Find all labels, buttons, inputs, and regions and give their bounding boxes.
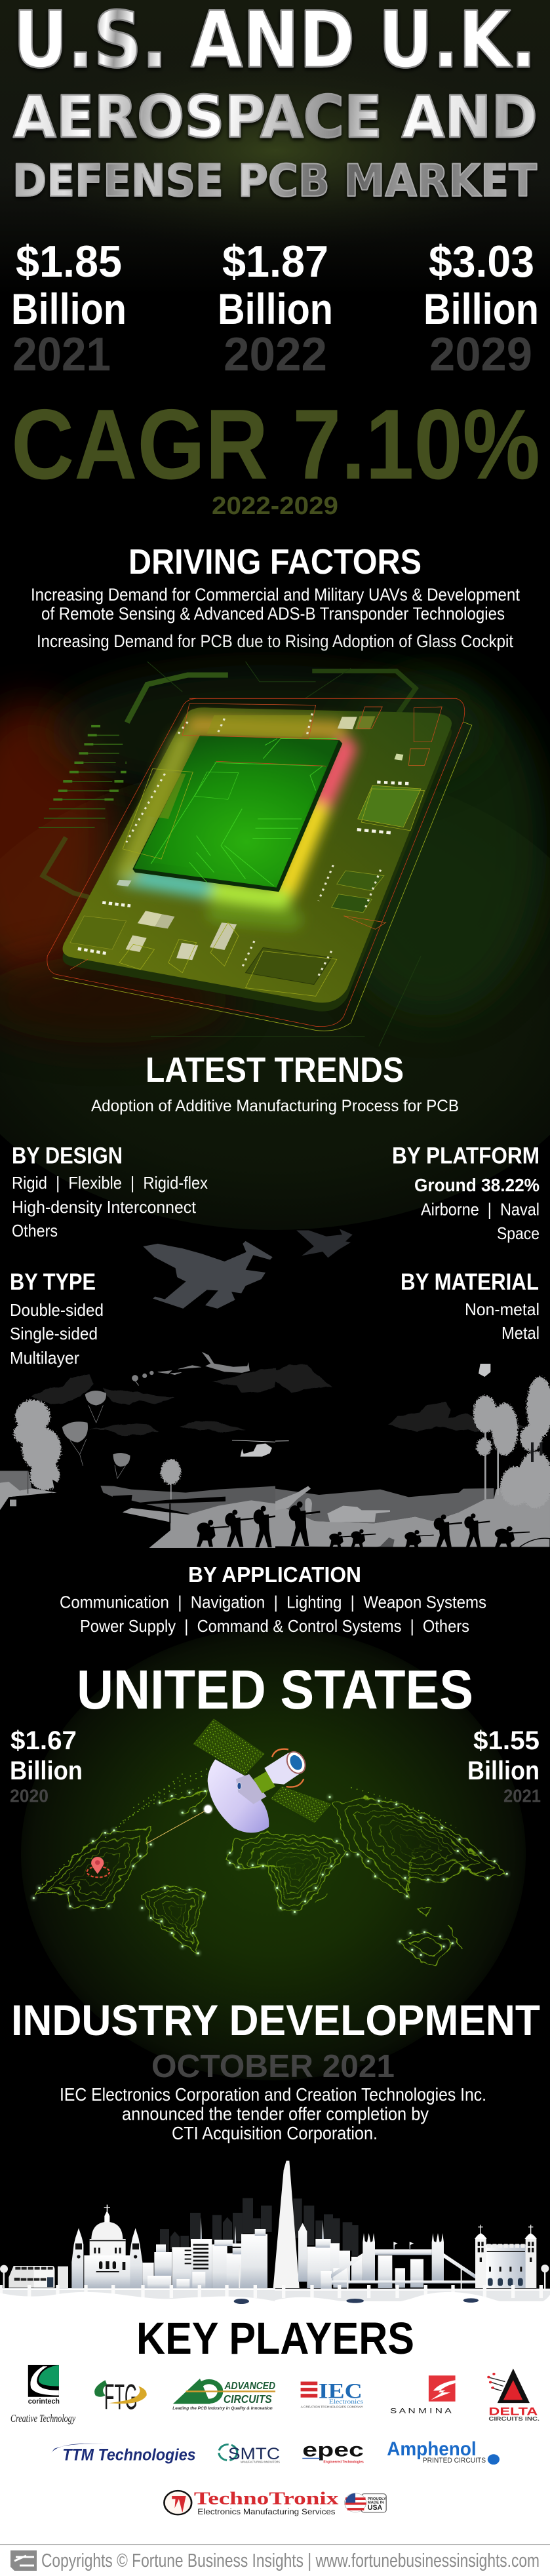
helicopter top bbox=[275, 1364, 490, 1441]
ambient glow bbox=[0, 665, 547, 1043]
icon: small jet bbox=[296, 1229, 353, 1258]
latest trends heading: LATEST TRENDS bbox=[146, 1050, 404, 1090]
driving factors text bbox=[31, 585, 520, 651]
regional stat 2020 bbox=[10, 1726, 83, 1806]
board base bbox=[63, 707, 452, 1012]
logo: TechnoTronix bbox=[164, 2487, 386, 2516]
United States heading: UNITED STATES bbox=[77, 1659, 473, 1720]
segment: by application: BY APPLICATION bbox=[188, 1562, 361, 1587]
stat 2022: 2022 bbox=[224, 328, 327, 381]
illustration: skyline right bbox=[273, 2161, 550, 2308]
soldiers bbox=[197, 1506, 282, 1547]
bus bbox=[9, 2266, 54, 2288]
stat 2022: $1.87 bbox=[222, 237, 328, 287]
parachutes bbox=[62, 1366, 201, 1478]
icon: transport plane bbox=[202, 1352, 250, 1373]
illustration: world map bbox=[33, 1768, 508, 1965]
latest trends backdrop bbox=[0, 763, 550, 1230]
segment: by type: BY TYPE bbox=[10, 1269, 96, 1295]
industry development text: announced the tender offer completion by bbox=[122, 2103, 429, 2124]
logo: epec: epec bbox=[302, 2439, 364, 2461]
segment: by material: Metal bbox=[501, 1323, 540, 1343]
processor chip bbox=[132, 735, 342, 892]
logo: IEC: IEC bbox=[319, 2379, 363, 2403]
logo: FTG: FTG bbox=[104, 2376, 138, 2417]
logo: Amphenol: PRINTED CIRCUITS bbox=[423, 2456, 486, 2465]
segment: by platform bbox=[392, 1143, 540, 1243]
regional stat 2020: 2020 bbox=[10, 1786, 49, 1806]
logo: IEC bbox=[301, 2379, 363, 2408]
tank bbox=[0, 1471, 226, 1549]
soldered components bbox=[70, 713, 421, 985]
logo: Delta Circuits: DELTA bbox=[488, 2406, 538, 2417]
segment: by design: BY DESIGN bbox=[12, 1143, 123, 1168]
illustration: skyline left bbox=[0, 2198, 275, 2308]
background traces bbox=[39, 662, 421, 1046]
illustration: battlefield right bbox=[275, 1364, 550, 1560]
icon: Fortune Business Insights mark bbox=[10, 2550, 37, 2571]
logo: Advanced Circuits bbox=[172, 2379, 275, 2411]
segment: by platform: Space bbox=[497, 1223, 540, 1243]
stat 2021: $1.85 bbox=[16, 237, 122, 287]
logo: Advanced Circuits: Leading the PCB Industry in Quality & Innovation bbox=[172, 2406, 273, 2411]
logo: Delta Circuits: CIRCUITS INC. bbox=[488, 2416, 540, 2422]
lamp post bbox=[0, 2265, 8, 2290]
map backdrop bbox=[21, 1628, 526, 2080]
icon: location pin bbox=[87, 1857, 109, 1877]
segment: by material: Non-metal bbox=[465, 1299, 540, 1319]
industry development text: IEC Electronics Corporation and Creation Technologies Inc. bbox=[60, 2084, 486, 2105]
driving factors text: of Remote Sensing & Advanced ADS-B Transponder Technologies bbox=[41, 604, 505, 624]
dark buildings bbox=[160, 2198, 272, 2253]
regional stat 2020: $1.67 bbox=[10, 1726, 77, 1755]
stat 2029: 2029 bbox=[429, 328, 532, 381]
shard tower bbox=[273, 2161, 300, 2288]
thin circuit outlines bbox=[70, 703, 442, 996]
logo: TechnoTronix: MADE IN bbox=[368, 2501, 384, 2505]
logo: SMTC: MANUFACTURING INNOVATORS bbox=[241, 2461, 280, 2463]
illustration: satellite bbox=[146, 1719, 331, 1844]
trees bbox=[473, 1377, 550, 1508]
outline layers bbox=[47, 698, 472, 1031]
logo: corintech bbox=[10, 2365, 76, 2425]
industry development text bbox=[60, 2084, 486, 2143]
segment: by type: Double-sided bbox=[10, 1300, 104, 1320]
CAGR headline: 2022-2029 bbox=[212, 492, 338, 520]
wave edge bbox=[0, 2292, 275, 2308]
rainbow glow around chip bbox=[128, 725, 345, 919]
logo: TechnoTronix: USA bbox=[368, 2503, 383, 2512]
segment: by type: Multilayer bbox=[10, 1348, 79, 1368]
cathedral bbox=[71, 2205, 142, 2290]
clouds bbox=[31, 1368, 275, 1436]
icon: fighter jets bbox=[143, 1229, 353, 1373]
date: OCTOBER 2021 bbox=[151, 2049, 395, 2084]
title: AEROSPACE AND bbox=[13, 83, 538, 151]
header background glow bbox=[0, 0, 550, 295]
logo: Delta Circuits bbox=[487, 2369, 540, 2422]
segment: by application bbox=[60, 1562, 486, 1636]
segment: by material bbox=[401, 1269, 540, 1343]
market size figures bbox=[11, 237, 539, 381]
laser beam bbox=[146, 1810, 208, 1844]
logo: epec: Engineered Technologies bbox=[323, 2461, 364, 2464]
coast lights bbox=[33, 1790, 508, 1956]
wave edge bbox=[275, 2292, 550, 2308]
city buildings bbox=[142, 2217, 267, 2290]
segment: by design: Others bbox=[12, 1221, 58, 1240]
illustration: circuit board bbox=[0, 662, 547, 1046]
dish bbox=[208, 1759, 269, 1833]
tower bridge bbox=[331, 2233, 477, 2284]
regional stat 2021: $1.55 bbox=[473, 1726, 540, 1755]
company logos bbox=[10, 2365, 540, 2516]
segment: by platform: Airborne | Naval bbox=[421, 1200, 540, 1219]
stat 2029: $3.03 bbox=[429, 237, 534, 287]
building windows bbox=[185, 2244, 241, 2269]
logo: Sanmina: S A N M I N A bbox=[390, 2406, 452, 2415]
industry development text: CTI Acquisition Corporation. bbox=[172, 2123, 378, 2143]
segment: by platform: Ground 38.22% bbox=[414, 1175, 540, 1195]
white lower panel bbox=[0, 2298, 550, 2576]
logo: Advanced Circuits: CIRCUITS bbox=[224, 2392, 272, 2406]
icon: large jet bbox=[143, 1241, 273, 1309]
stat 2022: Billion bbox=[218, 285, 333, 333]
logo: TTM Technologies: TTM Technologies bbox=[62, 2445, 196, 2464]
regional stat 2021 bbox=[467, 1726, 541, 1806]
trees bbox=[14, 1400, 181, 1501]
hills bbox=[0, 1471, 275, 1549]
stat 2029 bbox=[423, 237, 539, 381]
clouds bbox=[275, 1365, 524, 1431]
artillery and tank silhouettes bbox=[275, 1486, 390, 1522]
helicopter bbox=[232, 1440, 275, 1457]
logo: corintech: corintech bbox=[28, 2397, 60, 2406]
logo: corintech: Creative Technology bbox=[10, 2412, 76, 2425]
logo: FTG bbox=[94, 2376, 147, 2417]
beam source bbox=[205, 1806, 212, 1813]
logo: TechnoTronix: PROUDLY bbox=[368, 2497, 386, 2501]
segment: by type: Single-sided bbox=[10, 1324, 98, 1343]
segment: by type bbox=[10, 1269, 104, 1368]
bridge bbox=[0, 2288, 275, 2301]
regional stat 2021: Billion bbox=[467, 1756, 540, 1785]
segment: by application: Communication | Navigation | Lighting | Weapon Systems bbox=[60, 1592, 486, 1612]
scattered light particles bbox=[42, 1768, 456, 1884]
bridge bbox=[275, 2289, 550, 2301]
driving factors heading: DRIVING FACTORS bbox=[128, 542, 422, 582]
tower fortress bbox=[475, 2225, 537, 2288]
body bbox=[236, 1749, 309, 1804]
logo: IEC: Electronics bbox=[329, 2399, 363, 2406]
solar panels bbox=[193, 1719, 331, 1823]
segment: by design: Rigid | Flexible | Rigid-flex bbox=[12, 1173, 208, 1193]
street lamp bbox=[347, 2265, 549, 2289]
logo: TechnoTronix: Electronics Manufacturing Services bbox=[197, 2507, 336, 2516]
regional stat 2020: Billion bbox=[10, 1756, 83, 1785]
logo: Sanmina bbox=[390, 2375, 456, 2415]
hills bbox=[275, 1469, 550, 1549]
regional stat 2021: 2021 bbox=[503, 1786, 541, 1806]
logo: SMTC: SMTC bbox=[228, 2444, 280, 2463]
latest trends text: Adoption of Additive Manufacturing Process for PCB bbox=[91, 1097, 459, 1115]
skyscrapers bbox=[298, 2221, 423, 2289]
stat 2021: Billion bbox=[11, 285, 127, 333]
logo: Advanced Circuits: ADVANCED bbox=[224, 2380, 275, 2392]
segment: by design bbox=[12, 1143, 208, 1240]
continents contour lines bbox=[35, 1791, 505, 1965]
illustration: battlefield left bbox=[0, 1366, 282, 1561]
dark buildings bbox=[293, 2198, 359, 2256]
title bbox=[12, 0, 538, 207]
logo: Amphenol: Amphenol bbox=[387, 2438, 477, 2460]
stat 2021: 2021 bbox=[12, 328, 111, 381]
stat 2021 bbox=[11, 237, 127, 381]
segment: by application: Power Supply | Command & Control Systems | Others bbox=[80, 1616, 469, 1636]
key players heading: KEY PLAYERS bbox=[136, 2313, 414, 2364]
logo: IEC: A CREATION TECHNOLOGIES COMPANY bbox=[301, 2406, 363, 2408]
soldiers bbox=[289, 1501, 550, 1551]
stat 2022 bbox=[218, 237, 333, 381]
logo: TechnoTronix: TechnoTronix bbox=[194, 2487, 338, 2508]
segment: by design: High-density Interconnect bbox=[12, 1197, 197, 1217]
